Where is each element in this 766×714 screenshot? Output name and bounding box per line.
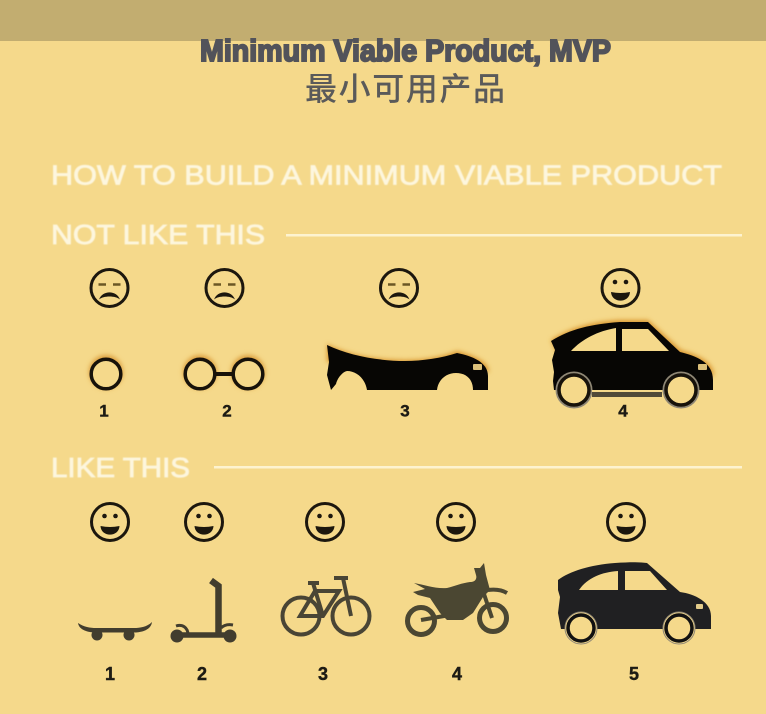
face: sad 1 <box>91 270 128 306</box>
section heading: not like this: NOT LIKE THIS <box>51 219 265 250</box>
number 4: 4 <box>618 402 628 420</box>
icon: complete car <box>551 320 714 408</box>
number 4: 4 <box>452 664 462 684</box>
number 2: 2 <box>222 402 232 420</box>
face: happy 4 <box>602 270 639 306</box>
number 3: 3 <box>318 664 328 684</box>
face: sad 2 <box>206 270 243 306</box>
face: happy 1 <box>92 504 128 540</box>
icon: scooter <box>170 580 236 642</box>
top band <box>0 0 766 41</box>
number 2: 2 <box>197 664 207 684</box>
face: happy 2 <box>186 504 222 540</box>
number 1: 1 <box>99 402 109 420</box>
icon: car body shell <box>327 344 489 390</box>
number 3: 3 <box>400 402 410 420</box>
section heading: like this: LIKE THIS <box>51 452 190 483</box>
icon: one wheel <box>89 355 123 389</box>
icon: full car <box>558 562 711 644</box>
number 1: 1 <box>105 664 115 684</box>
number 5: 5 <box>629 664 639 684</box>
title: English: Minimum Viable Product, MVP <box>200 33 611 68</box>
face: sad 3 <box>380 270 418 306</box>
face: happy 4 <box>438 504 474 540</box>
panel: like this <box>51 452 742 684</box>
icon: two wheels with axle <box>183 355 265 389</box>
title: Chinese: 最小可用产品 <box>305 64 505 110</box>
icon: motorbike <box>408 563 507 634</box>
panel: not like this <box>51 219 742 420</box>
icon: bicycle <box>282 578 370 634</box>
icon: skateboard <box>78 622 152 640</box>
title <box>200 33 611 110</box>
heading: how to build: HOW TO BUILD A MINIMUM VIABLE PRODUCT <box>51 160 722 190</box>
face: happy 5 <box>608 504 644 540</box>
face: happy 3 <box>306 504 344 540</box>
